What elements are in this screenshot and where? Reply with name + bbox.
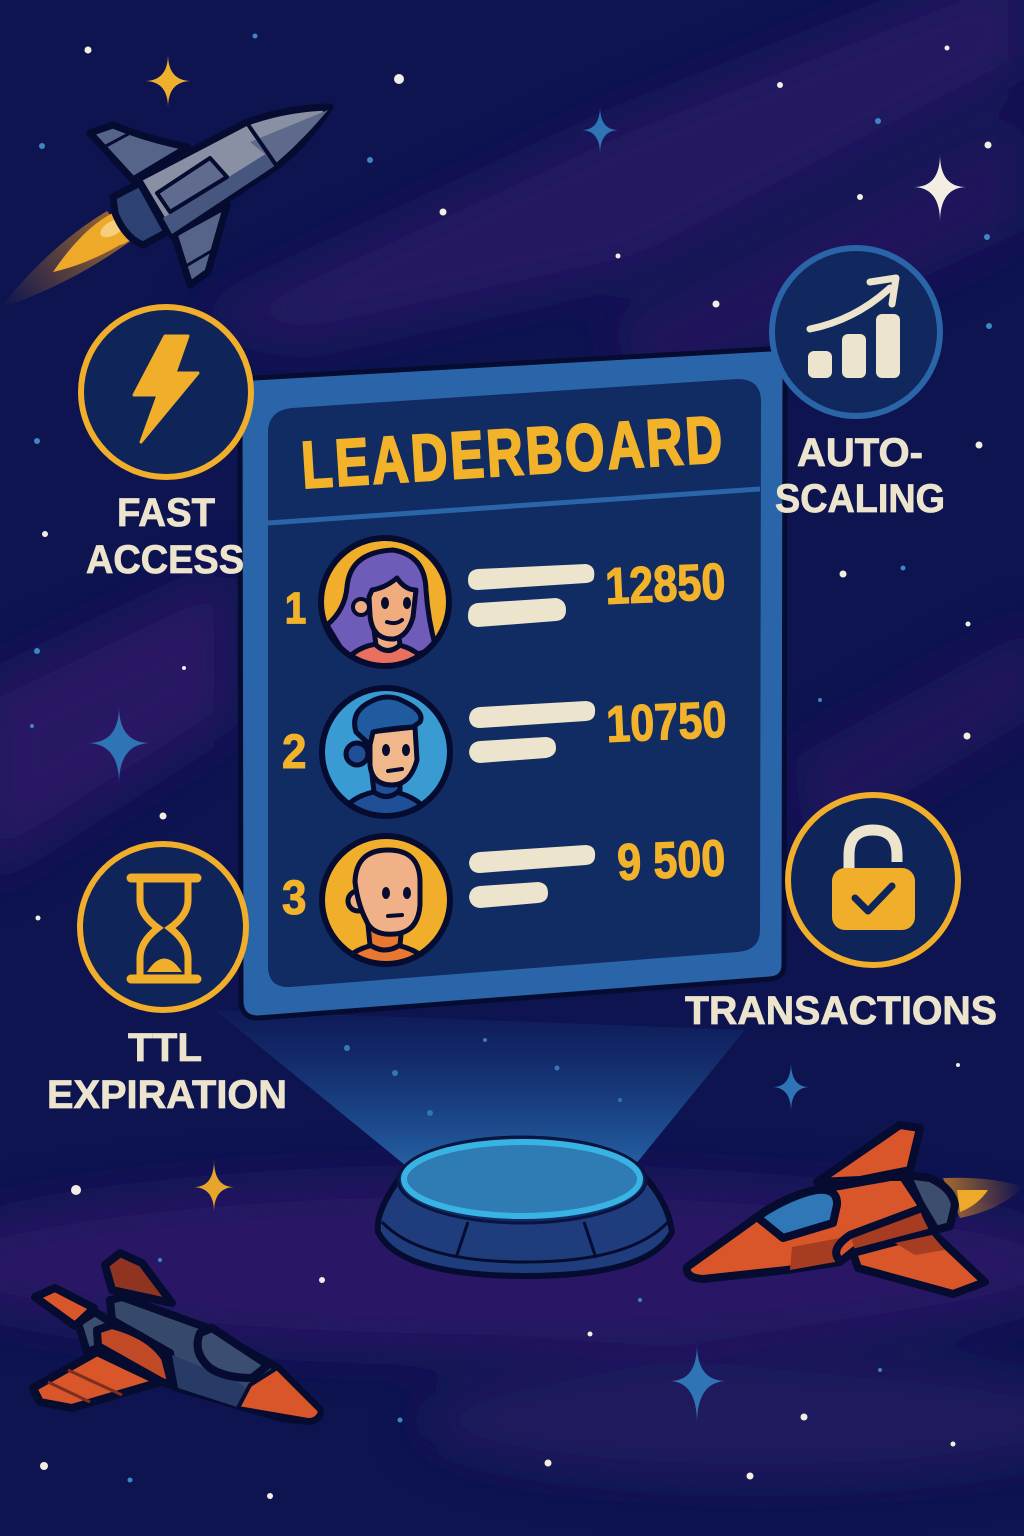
lower wing xyxy=(33,1352,160,1408)
leaderboard panel xyxy=(240,349,785,1018)
rank 2: 2 xyxy=(282,724,306,778)
sparkle: blue top xyxy=(582,106,618,154)
engine xyxy=(113,183,167,245)
side pod xyxy=(97,1325,172,1385)
ship: lower left xyxy=(33,1253,320,1421)
label: fast access: ACCESS xyxy=(86,538,244,582)
ship: lower right xyxy=(687,1125,1024,1294)
sparkle: blue left xyxy=(88,706,150,784)
rank 3: 3 xyxy=(282,870,306,924)
icon: fast access xyxy=(81,307,251,477)
lower wing xyxy=(853,1232,985,1294)
projector base xyxy=(378,1137,672,1276)
window xyxy=(157,158,227,212)
score 2: 10750 xyxy=(605,691,728,754)
cockpit xyxy=(198,1328,268,1378)
name bars 1 xyxy=(468,564,594,627)
label: ttl expiration xyxy=(47,1026,287,1117)
flame trail xyxy=(0,211,132,308)
icon: ttl expiration xyxy=(80,844,246,1010)
exhaust xyxy=(943,1178,1024,1218)
fuselage xyxy=(687,1177,932,1279)
cockpit xyxy=(757,1190,837,1238)
engine xyxy=(907,1175,955,1230)
rank 1: 1 xyxy=(285,583,306,633)
top fin xyxy=(817,1125,920,1182)
rocket xyxy=(0,107,330,308)
label: fast access xyxy=(86,491,244,582)
fuselage xyxy=(110,1297,320,1421)
name bars 3 xyxy=(469,845,595,908)
sparkle: gold lower left xyxy=(194,1160,234,1212)
projector beam xyxy=(215,1010,745,1165)
icon: transactions xyxy=(788,795,958,965)
label: ttl expiration: EXPIRATION xyxy=(47,1073,287,1117)
row 3 xyxy=(282,830,727,972)
avatar 1 xyxy=(321,538,449,672)
icon: auto-scaling xyxy=(772,248,940,416)
name bars 2 xyxy=(469,701,595,763)
avatar 3 xyxy=(322,836,450,972)
flame xyxy=(53,211,135,272)
sparkle: blue bottom xyxy=(670,1344,726,1424)
sparkle: gold top xyxy=(146,54,190,108)
label: transactions: TRANSACTIONS xyxy=(685,989,997,1033)
avatar 2 xyxy=(322,687,450,820)
lower fin xyxy=(174,205,227,285)
engine xyxy=(78,1312,115,1352)
upper fin xyxy=(90,125,188,180)
nose xyxy=(238,1368,320,1420)
top fin xyxy=(105,1253,172,1303)
score 3: 9 500 xyxy=(616,830,727,892)
label: fast access: FAST xyxy=(117,491,215,535)
title: LEADERBOARD xyxy=(299,403,724,503)
label: auto-scaling: AUTO- xyxy=(797,431,923,475)
score 1: 12850 xyxy=(604,553,727,616)
label: ttl expiration: TTL xyxy=(128,1026,202,1070)
sparkle: blue lower right xyxy=(773,1062,809,1112)
sparkle: white right xyxy=(914,154,966,222)
label: auto-scaling xyxy=(775,431,945,521)
row 2 xyxy=(282,687,728,820)
fuselage xyxy=(138,107,330,236)
rear fin xyxy=(35,1288,94,1326)
row 1 xyxy=(285,538,727,672)
label: auto-scaling: SCALING xyxy=(775,477,945,521)
